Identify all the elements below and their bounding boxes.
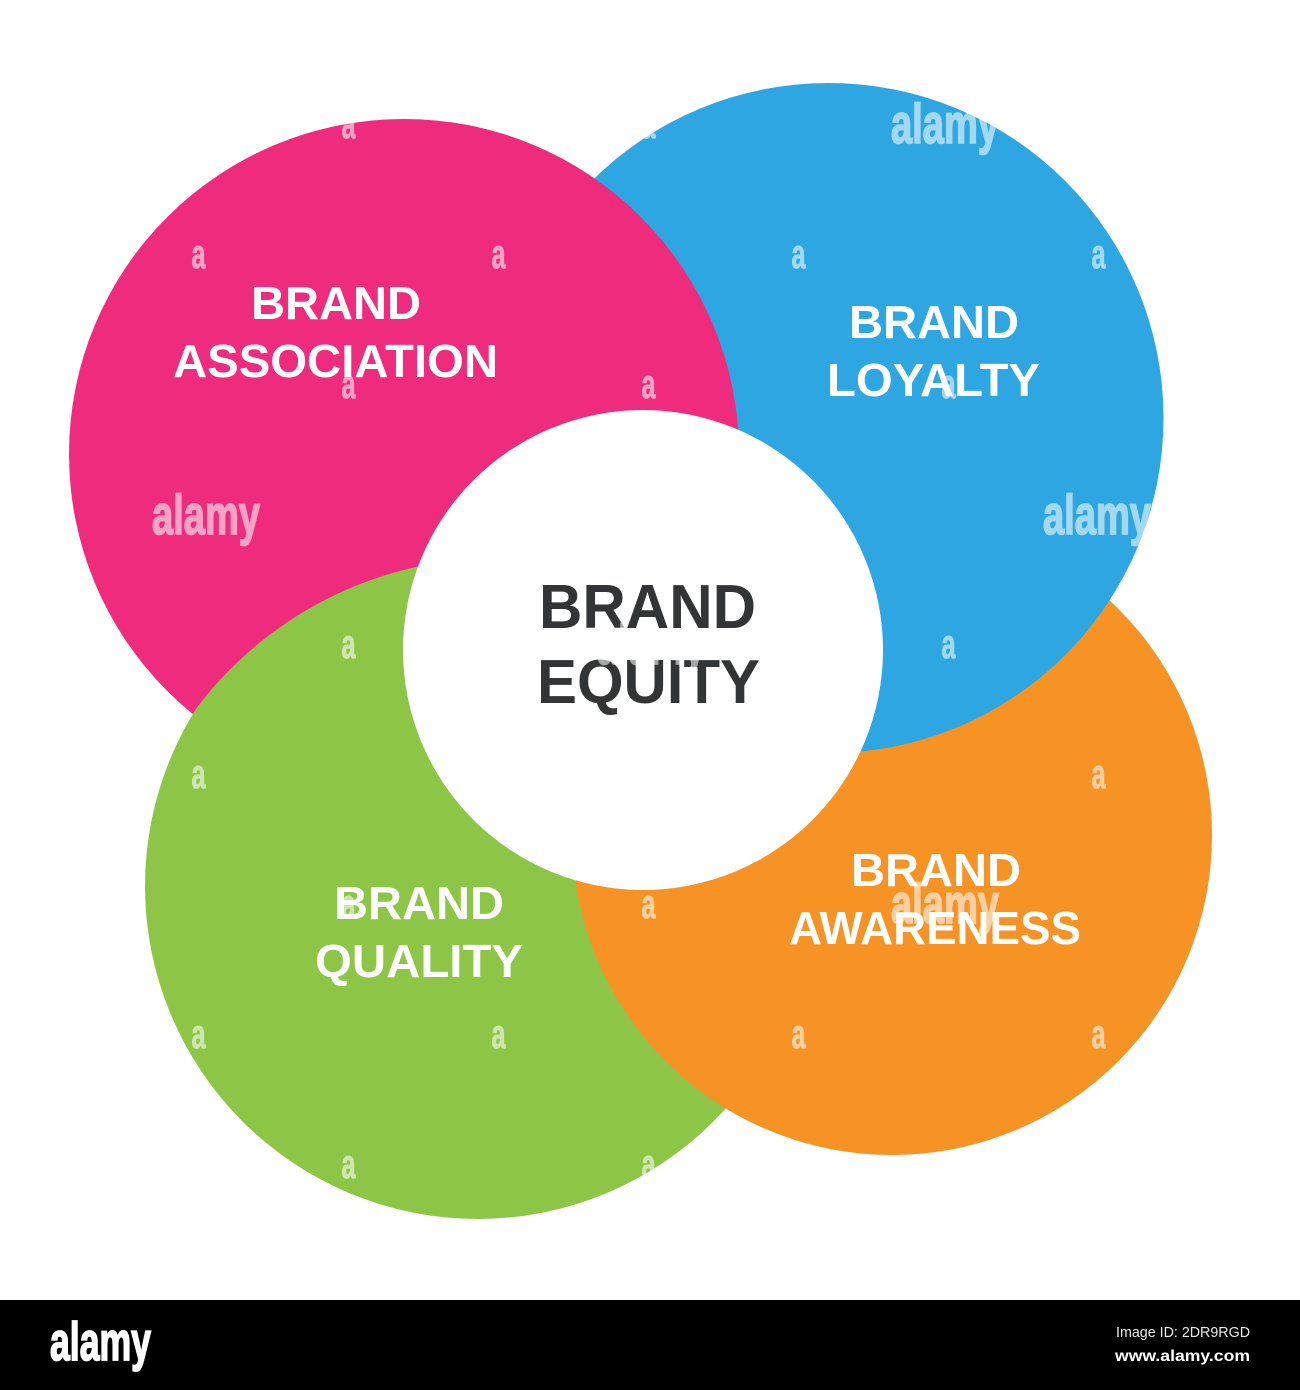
watermarks: a xyxy=(792,231,806,277)
watermarks: a xyxy=(642,101,656,147)
circle: brand quality xyxy=(145,566,726,1219)
label: brand association: ASSOCIATION xyxy=(173,335,498,387)
watermarks: a xyxy=(342,621,356,667)
watermarks: a xyxy=(192,231,206,277)
circle: brand association xyxy=(69,119,739,789)
label: brand quality xyxy=(315,877,523,987)
watermarks: alamy xyxy=(597,613,705,676)
label: brand loyalty xyxy=(827,296,1040,406)
watermarks: a xyxy=(942,361,956,407)
footer bar xyxy=(0,1300,1300,1390)
watermarks: a xyxy=(642,1141,656,1187)
label: brand awareness: AWARENESS xyxy=(789,902,1081,954)
watermarks: a xyxy=(192,751,206,797)
overlap: brand association over brand loyalty xyxy=(450,122,738,460)
label: brand loyalty: LOYALTY xyxy=(827,354,1040,406)
footer logo: alamy xyxy=(50,1312,151,1372)
image id: Image ID: 2DR9RGD xyxy=(1116,1324,1250,1341)
watermarks: a xyxy=(1092,231,1106,277)
watermarks: alamy xyxy=(152,483,260,546)
watermarks xyxy=(152,92,1151,1187)
footer url: www.alamy.com xyxy=(1114,1348,1250,1365)
watermarks: alamy xyxy=(891,92,999,155)
label: brand equity: BRAND xyxy=(539,573,756,642)
circle: brand awareness xyxy=(572,515,1212,1155)
watermarks: a xyxy=(642,361,656,407)
circle: brand equity centre xyxy=(403,410,883,890)
watermarks: a xyxy=(942,621,956,667)
watermarks: a xyxy=(342,1141,356,1187)
watermarks: a xyxy=(342,881,356,927)
label: brand loyalty: BRAND xyxy=(849,296,1019,348)
label: brand quality: QUALITY xyxy=(315,935,523,987)
label: brand association xyxy=(173,277,498,387)
circle: brand loyalty xyxy=(494,83,1164,753)
watermarks: alamy xyxy=(1043,483,1151,546)
watermarks: a xyxy=(492,1011,506,1057)
watermarks: a xyxy=(1092,751,1106,797)
watermarks: a xyxy=(342,361,356,407)
label: brand equity xyxy=(537,573,760,717)
watermarks: a xyxy=(1092,1011,1106,1057)
label: brand awareness xyxy=(789,844,1081,954)
label: brand association: BRAND xyxy=(251,277,421,329)
watermarks: alamy xyxy=(891,872,999,935)
label: brand equity: EQUITY xyxy=(537,648,760,717)
watermarks: a xyxy=(492,231,506,277)
watermarks: a xyxy=(792,1011,806,1057)
watermarks: a xyxy=(192,1011,206,1057)
watermarks: a xyxy=(642,881,656,927)
label: brand awareness: BRAND xyxy=(851,844,1021,896)
label: brand quality: BRAND xyxy=(334,877,504,929)
watermarks: a xyxy=(342,101,356,147)
